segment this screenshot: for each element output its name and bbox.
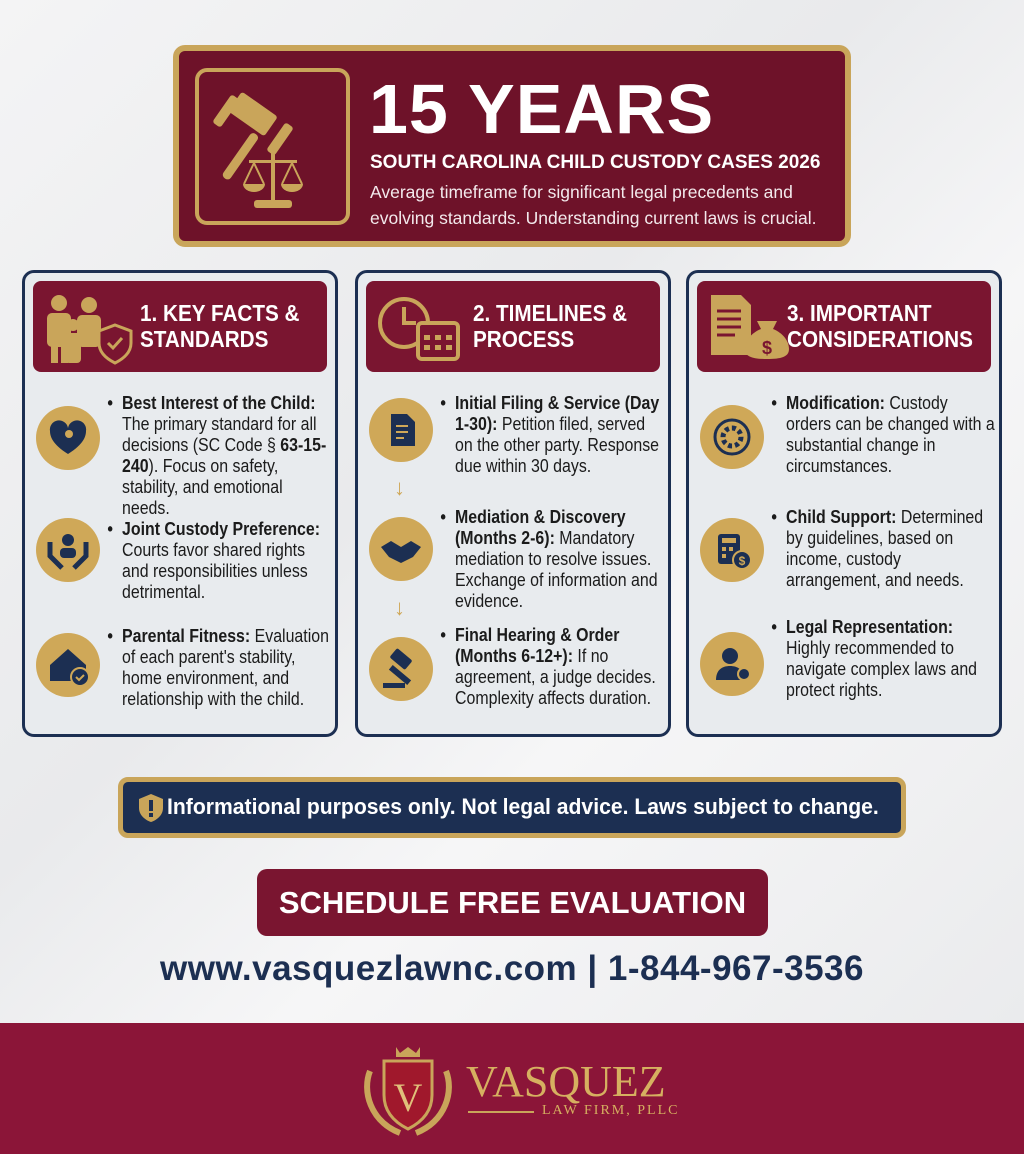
- icon: gear: [700, 405, 764, 469]
- panel header: considerations: $: [762, 338, 772, 358]
- panel: key facts: [22, 270, 338, 737]
- panel header: considerations: 3. IMPORTANT: [787, 300, 932, 326]
- disclaimer text: Informational purposes only. Not legal advice. Laws subject to change.: [167, 794, 879, 819]
- icon: calculator: [700, 518, 764, 582]
- text: mediation: Mediation & Discovery (Months 2-6): Mandatory mediation to resolve issues. Exchange of information and evidence.: [455, 506, 658, 611]
- panel header: timelines: PROCESS: [473, 326, 574, 352]
- text: child support: Child Support: Determined by guidelines, based on income, custody arrangement, and needs.: [786, 506, 983, 590]
- panel header: key facts: 1. KEY FACTS &: [140, 300, 300, 326]
- subtitle: SOUTH CAROLINA CHILD CUSTODY CASES 2026: [370, 152, 820, 173]
- logo: LAW FIRM, PLLC: [542, 1103, 679, 1118]
- icon: lawyer: [700, 632, 764, 696]
- disclaimer bar: [118, 777, 906, 838]
- panel header: timelines: [366, 281, 660, 372]
- CTA button: [257, 869, 768, 936]
- text: final hearing: Final Hearing & Order (Months 6-12+): If no agreement, a judge decides. Complexity affects duration.: [455, 624, 656, 708]
- icon: house check: [36, 633, 100, 697]
- logo: VASQUEZ: [466, 1057, 666, 1106]
- text: initial filing: Initial Filing & Service (Day 1-30): Petition filed, served on the other party. Response due within 30 days.: [455, 392, 659, 476]
- icon: gavel and scales: [195, 68, 350, 225]
- icon: heart: [36, 406, 100, 470]
- icon: hands: [36, 518, 100, 582]
- footer: [0, 1023, 1024, 1154]
- description: Average timeframe for significant legal precedents and evolving standards. Understanding current laws is crucial.: [370, 182, 816, 228]
- logo: V: [394, 1075, 423, 1120]
- icon: calculator: $: [739, 554, 746, 568]
- panel: timelines: [355, 270, 671, 737]
- text: joint custody: Joint Custody Preference: Courts favor shared rights and responsibilities unless detrimental.: [122, 518, 320, 602]
- contact line: www.vasquezlawnc.com | 1-844-967-3536: [160, 949, 864, 988]
- icon: document: [369, 398, 433, 462]
- panel header: timelines: 2. TIMELINES &: [473, 300, 627, 326]
- icon: shield warning: [139, 794, 163, 822]
- text: modification: Modification: Custody orders can be changed with a substantial change in circumstances.: [786, 392, 995, 476]
- icon: gavel: [369, 637, 433, 701]
- panel header: considerations: CONSIDERATIONS: [787, 326, 973, 352]
- icon: handshake: [369, 517, 433, 581]
- title: 15 YEARS: 15 YEARS: [369, 70, 714, 148]
- panel: considerations: [686, 270, 1002, 737]
- panel header: key facts: STANDARDS: [140, 326, 268, 352]
- text: parental fitness: Parental Fitness: Evaluation of each parent's stability, home environment, and relationship with the child.: [122, 625, 329, 709]
- arrow: ↓: [394, 475, 405, 500]
- panel header: key facts: [33, 281, 327, 372]
- CTA button: SCHEDULE FREE EVALUATION: [279, 885, 746, 920]
- text: best interest: Best Interest of the Child: The primary standard for all decisions (SC Code § 63-15-240). Focus on safety, stability, and emotional needs.: [122, 392, 326, 518]
- header banner: [173, 45, 851, 247]
- panel header: considerations: [697, 281, 991, 372]
- arrow: ↓: [394, 595, 405, 620]
- text: legal representation: Legal Representation: Highly recommended to navigate complex laws and protect rights.: [786, 616, 977, 700]
- logo: [364, 1047, 679, 1136]
